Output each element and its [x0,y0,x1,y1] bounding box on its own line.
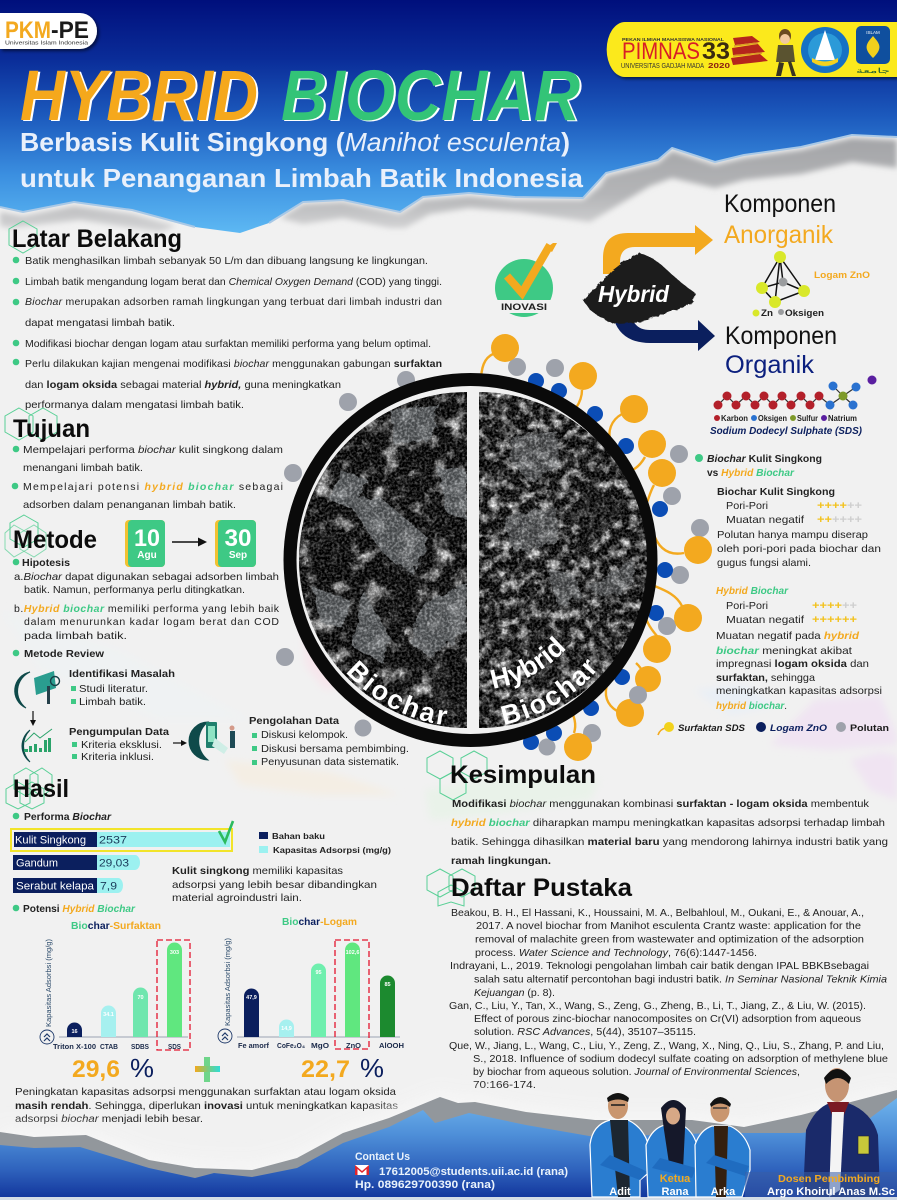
text: pengolahan data [249,715,409,768]
text: hybrid biochar: Pori-Pori [726,600,768,612]
panel: tujuan [5,408,283,511]
text: hybrid biochar: impregnasi logam oksida dan [716,658,869,670]
heading: komponen anorganik [724,190,836,249]
text: conclusion [451,798,888,867]
figure: Rana: Rana [662,1186,689,1198]
list: objectives: Mempelajari potensi hybrid biochar sebagai [23,481,283,493]
photo: biochar SEM [295,385,470,735]
text: pengumpulan data [69,726,169,763]
subheading: potensi hybrid biochar: Potensi Hybrid Biochar [23,903,136,915]
logos: PIMNAS 33 banner: 33 [702,38,730,65]
label: Biochar (hybrid): Biochar [500,659,596,725]
text: results summary: masih rendah . Sehingga, diperlukan inovasi untuk meningkatkan kapasitas [15,1100,398,1112]
date card: 30 Sep: Sep [229,550,247,561]
icon: mascot [776,29,796,76]
footer: sea and ridges [0,1085,897,1200]
chart: biochar-logam: CoFe₂O₄ [277,1041,305,1050]
text: kulit singkong note: material agroindustri lain. [172,892,302,904]
chart: biochar-surfaktan: CTAB [100,1042,119,1051]
chart: biochar-surfaktan: Triton X-100 [53,1042,96,1051]
bar chart: adsorption by agro material: 7,9 [100,880,117,892]
chart: biochar-logam [218,916,404,1050]
heading: comparison [695,453,822,479]
heading: daftar pustaka: Daftar Pustaka [451,874,633,902]
diagram: ZnO tetrahedron: Oksigen [785,308,824,318]
diagram: SDS molecule: Sodium Dodecyl Sulphate (SDS) [710,425,862,437]
text: contact: Contact Us [355,1151,410,1163]
list: background points: dapat mengatasi limbah batik. [25,317,175,329]
list: background points: Modifikasi biochar dengan logam atau surfaktan memiliki performa yang belum optimal. [25,338,431,350]
text: references: salah satu alternatif percontohan bagi industri batik. In Seminar Nasional Teknik Kimia [474,974,887,986]
logos: PIMNAS 33 banner: PEKAN ILMIAH MAHASISWA NASIONAL [622,37,724,42]
panel: metode [5,515,409,768]
text: hybrid biochar [716,585,882,712]
icon: inovasi badge [494,243,557,317]
text: references [449,907,888,1091]
title: HYBRID BIOCHAR: BIOCHAR [283,58,582,137]
text: results summary [15,1086,398,1125]
subtitle: untuk Penanganan Limbah Batik Indonesia [20,163,584,193]
text: pengumpulan data: Pengumpulan Data [69,726,169,738]
text: hybrid biochar: biochar meningkat akibat [716,645,852,657]
subheading: performa biochar: Performa Biochar [24,811,112,823]
text: pengolahan data: Diskusi bersama pembimbing. [261,743,409,755]
text: contact: Hp. 089629700390 (rana) [355,1179,495,1191]
heading: komponen organik [725,322,837,379]
logo: PKM-PE [0,13,97,49]
text: identifikasi masalah: Limbah batik. [79,696,146,708]
list: background points [13,255,442,411]
chart: biochar-logam: Biochar-Logam [282,916,357,928]
list: background points: Limbah batik mengandung logam berat dan Chemical Oxygen Demand (COD) yang tinggi. [25,276,442,288]
photo circle: biochar vs hybrid biochar [284,373,658,747]
text: hipotesis [13,557,280,642]
text: references: Kejuangan (p. 8). [474,987,555,999]
text: biochar kulit singkong: Biochar Kulit Singkong [717,486,835,498]
text: biochar kulit singkong: ++++++ [817,514,862,526]
diagram: SDS molecule: Sulfur [797,414,818,423]
logos: PIMNAS 33 banner: PIMNAS [622,38,700,65]
text: hybrid biochar: hybrid biochar. [716,700,787,712]
chart: biochar-logam: 95 [315,970,322,976]
icon: inovasi badge: INOVASI [501,302,547,313]
chart: biochar-surfaktan: SDS [168,1042,181,1051]
icon: UII seal [856,26,890,75]
text: pengolahan data: Diskusi kelompok. [261,729,348,741]
text: results summary: Peningkatan kapasitas adsorpsi menggunakan surfaktan atau logam oksida [15,1086,396,1098]
text: kulit singkong note [172,865,377,904]
text: metode review: Metode Review [24,648,105,660]
text: identifikasi masalah: Identifikasi Masalah [69,668,175,680]
logos: PIMNAS 33 banner: 2020 [708,63,730,70]
figure: Adit [590,1093,652,1198]
text: kulit singkong note: adsorpsi yang lebih besar dibandingkan [172,879,377,891]
title: HYBRID BIOCHAR: BIOCHAR [281,57,580,136]
list: background points: Biochar merupakan adsorben ramah lingkungan yang terbuat dari limbah industri dan [25,296,442,308]
chart: biochar-surfaktan: 16 [71,1029,78,1035]
icon: hexagon motif [5,515,46,557]
arrow: timeline [172,538,207,546]
text: hipotesis: batik. Namun, performanya perlu ditingkatkan. [24,584,245,596]
date card: 30 Sep: 30 [224,525,252,552]
text: references: 2017. A novel biochar from Manihot esculenta Crantz waste: application for the [476,920,861,932]
text: kulit singkong note: Kulit singkong memiliki kapasitas [172,865,343,877]
legend: bar chart: Kapasitas Adsorpsi (mg/g) [273,845,391,855]
figure: Dosen: Argo Khoirul Anas M.Sc [767,1186,895,1198]
legend: particles: Logam ZnO [770,723,828,734]
subtitle [20,127,584,193]
icon: hexagon motif [5,408,57,440]
logo: PKM-PE: -PE [51,17,89,44]
text: hipotesis: a.Biochar dapat digunakan sebagai adsorben limbah [14,571,279,583]
bar chart: adsorption by agro material: Kulit Singkong [15,834,86,846]
text: contact: 17612005@students.uii.ac.id (rana) [379,1166,568,1178]
icon: UII seal: ISLAM [866,30,880,35]
legend: bar chart [259,831,391,855]
text: references: solution. RSC Advances, 5(44), 35107–35115. [474,1026,696,1038]
text: references: S., 2018. Influence of sodium dodecyl sulfate coating on adsorption of methylene blue [473,1053,888,1065]
top banner: sky with cloud edge [0,0,897,233]
chart: biochar-surfaktan: 34.1 [103,1012,114,1018]
text: hybrid biochar: meningkatkan kapasitas adsorpsi [716,685,882,697]
text: references: 70:166-174. [473,1079,536,1091]
heading: comparison: Biochar Kulit Singkong [707,453,822,465]
list: background points: Perlu dilakukan kajian mengenai modifikasi biochar menggunakan gabungan surfaktan [25,358,442,370]
date card: 30 Sep [215,520,256,567]
heading: kesimpulan: Kesimpulan [450,761,596,789]
text: biochar kulit singkong: oleh pori-pori pada biochar dan [717,543,881,555]
text: hybrid biochar: Muatan negatif pada hybrid [716,630,860,642]
figure: Arka: Arka [711,1186,736,1198]
text: hipotesis: dalam menurunkan kadar logam berat dan COD [24,616,279,628]
list: objectives: adsorben dalam penanganan limbah batik. [23,499,236,511]
heading: komponen anorganik: Anorganik [724,221,833,249]
text: references: process. Water Science and Technology , 76(6):1447-1456. [475,947,757,959]
diagram: SDS molecule [710,376,876,437]
text: references: by biochar from aqueous solution. Journal of Environmental Sciences, [473,1066,800,1078]
diagram: ZnO tetrahedron [752,251,870,318]
diagram: SDS molecule: Karbon [721,414,748,423]
date card: 10 Agu: Agu [137,550,157,561]
arrow: to anorganik [603,225,713,274]
figure: Arka [695,1097,750,1198]
text: hybrid biochar: Muatan negatif [726,614,804,626]
icon: hexagon motif [6,768,52,809]
text: references: Indrayani, L., 2019. Teknologi pengolahan limbah cair batik dengan IPAL BBKBsebagai [450,960,869,972]
diagram: SDS molecule: Oksigen [758,414,787,423]
heading: latar belakang: Latar Belakang [12,225,182,253]
chart: biochar-surfaktan: 303 [170,950,179,956]
text: hybrid biochar: Hybrid Biochar [716,585,789,597]
logo: PKM-PE: Universitas Islam Indonesia [5,40,89,46]
bar chart: adsorption by agro material: 2537 [99,834,127,846]
text: identifikasi masalah [69,668,175,708]
arrow: to organik [614,318,715,351]
icon: green check [219,821,233,842]
text: hybrid biochar: surfaktan, sehingga [716,672,815,684]
arrow: down [30,711,36,726]
text: biochar kulit singkong [717,486,881,569]
chart: biochar-surfaktan: SDBS [131,1042,149,1051]
logos: PIMNAS 33 banner: UNIVERSITAS GADJAH MADA [621,63,704,70]
list: background points: performanya dalam mengatasi limbah batik. [25,399,244,411]
text: references: Beakou, B. H., El Hassani, K., Houssaini, M. A., Belbahloul, M., Oukani, E., & Anouar, A., [451,907,864,919]
icon: growth chart [22,729,52,762]
text: references: removal of malachite green from wastewater and optimization of the adsorption [475,934,864,946]
heading: komponen anorganik: Komponen [724,190,836,218]
diagram: SDS molecule: Natrium [828,414,857,423]
heading: comparison: vs Hybrid Biochar [707,467,795,479]
text: references: Que, W., Jiang, L., Wang, C., Liu, Y., Zeng, Z., Wang, X., Ning, Q., Liu, S., Zhang, P. and Liu, [449,1040,884,1052]
text: contact [355,1151,568,1191]
chart: biochar-logam: MgO [311,1041,329,1050]
text: biochar kulit singkong: Muatan negatif [726,514,804,526]
list: background points: Batik menghasilkan limbah sebanyak 50 L/m dan dibuang langsung ke lingkungan. [25,255,428,267]
stat: 29,6 percent: 29,6 [72,1056,120,1083]
text: pengumpulan data: Kriteria inklusi. [81,751,154,763]
list: objectives: menangani limbah batik. [23,462,143,474]
text: conclusion: Modifikasi biochar menggunakan kombinasi surfaktan - logam oksida membentuk [452,798,870,810]
chart: biochar-logam: 85 [384,982,391,988]
text: pengolahan data: Penyusunan data sistematik. [261,756,399,768]
title: HYBRID BIOCHAR: HYBRID [20,57,258,136]
stat: 29,6 percent [72,1053,154,1083]
logos: PIMNAS 33 banner [607,22,897,77]
text: hybrid biochar: ++++++ [812,614,857,626]
decorations: surfactant, metal and pollutant particles around the ring [276,334,712,761]
text: conclusion: batik. Sehingga dihasilkan material baru yang mendorong lahirnya industri batik yang [451,836,888,848]
legend: particles: Polutan [850,723,889,734]
chart: biochar-logam: Fe amorf [238,1041,269,1050]
heading: metode: Metode [13,526,97,554]
text: results summary: adsorpsi biochar menjadi lebih besar. [15,1113,203,1125]
legend: bar chart: Bahan baku [272,831,325,841]
text: hipotesis: pada limbah batik. [24,630,127,642]
icon: blue ministry seal [801,27,849,73]
text: biochar kulit singkong: gugus fungsi alami. [717,557,811,569]
heading: hasil: Hasil [13,775,69,803]
heading: komponen organik: Organik [725,351,814,379]
chart: biochar-surfaktan [40,920,190,1051]
date card: 10 Agu [125,520,165,567]
text: hipotesis: b.Hybrid biochar memiliki performa yang lebih baik [14,603,280,615]
icon: hexagon motif [9,221,37,253]
diagram: ZnO tetrahedron: Zn [761,308,773,318]
background: faint Indonesia map [0,600,897,820]
icon: hybrid charcoal pile [583,253,695,323]
stat: 22,7 percent: 22,7 [301,1056,350,1083]
icon: hexagon motif [427,751,487,800]
icon: phone analysis [189,722,235,760]
diagram: ZnO tetrahedron: Logam ZnO [814,270,870,281]
bar chart: adsorption by agro material: Gandum [16,858,58,870]
bar chart: adsorption by agro material: 29,03 [99,858,129,870]
text: pengolahan data: Pengolahan Data [249,715,339,727]
arrow: right [173,740,187,746]
text: references: Effect of porous zinc-biochar nanocomposites on Cr(VI) adsorption from aqueous [474,1013,861,1025]
chart: biochar-logam: 47,9 [246,995,257,1001]
chart: biochar-logam: 102,6 [346,950,359,956]
label: Hybrid: Hybrid [490,636,566,689]
subtitle: Berbasis Kulit Singkong ( Manihot esculenta) [20,127,570,157]
chart: biochar-surfaktan: 70 [137,995,144,1001]
icon: mail [355,1165,369,1175]
stat: 29,6 percent: % [130,1053,154,1083]
chart: biochar-logam: 14,9 [281,1026,292,1032]
chart: biochar-logam: Kapasitas Adsorbsi (mg/g) [223,938,232,1026]
date card: 10 Agu: 10 [134,525,160,552]
icon: hexagon motif [427,869,475,906]
title: HYBRID BIOCHAR: HYBRID [22,58,260,137]
panel: hasil [6,768,404,1125]
logo: PKM-PE: PKM [5,17,51,44]
text: biochar kulit singkong: Polutan hanya mampu diserap [717,529,868,541]
text: conclusion: hybrid biochar diharapkan mampu meningkatkan kapasitas adsorpsi terhadap limbah [451,817,885,829]
chart: biochar-surfaktan: Biochar-Surfaktan [71,920,161,932]
label: Biochar: Biochar [346,660,448,724]
figure: Rana [646,1100,698,1198]
figure: Dosen: Dosen Pembimbing [778,1173,880,1185]
icon: magnifier research [15,671,60,708]
legend: particles [658,722,889,735]
panel: latar belakang [9,221,442,411]
heading: tujuan: Tujuan [13,415,90,443]
title: HYBRID BIOCHAR [20,57,582,137]
heading: komponen organik: Komponen [725,322,837,350]
panel: daftar pustaka [427,869,888,1091]
figure: Adit: Adit [609,1186,631,1198]
stat: 22,7 percent [301,1053,384,1083]
list: objectives: Mempelajari performa biochar kulit singkong dalam [23,444,283,456]
icon: UII seal: جامعة [856,67,890,75]
panel: biochar vs hybrid biochar [658,453,889,735]
figure: Dosen [745,1068,897,1198]
legend: particles: Surfaktan SDS [678,723,746,734]
text: biochar kulit singkong: ++++ ++ [817,500,862,512]
text: conclusion: ramah lingkungan. [451,855,551,867]
bar chart: adsorption by agro material: Serabut kelapa [16,880,95,892]
text: hybrid biochar: ++++ ++ [812,600,857,612]
divider: photo split [470,390,476,730]
photo: hybrid biochar SEM [475,385,650,735]
text: pengumpulan data: Kriteria eksklusi. [81,739,162,751]
text: hipotesis: Hipotesis [22,557,70,569]
icon: hybrid charcoal pile: Hybrid [598,281,670,307]
icon: plus [195,1057,220,1082]
stat: 22,7 percent: % [360,1053,384,1083]
chart: biochar-logam: AlOOH [379,1041,404,1050]
list: objectives [12,444,283,511]
text: identifikasi masalah: Studi literatur. [79,683,148,695]
figure: Rana: Ketua [660,1173,691,1185]
chart: biochar-logam: ZnO [346,1041,361,1050]
list: background points: dan logam oksida sebagai material hybrid, guna meningkatkan [25,379,341,391]
chart: biochar-surfaktan: Kapasitas Adsorbsi (mg/g) [44,939,53,1027]
text: references: Gan, C., Liu, Y., Tan, X., Wang, S., Zeng, G., Zheng, B., Li, T., Jiang, Z., & Liu, W. (2015). [449,1000,866,1012]
bar chart: adsorption by agro material [11,829,232,893]
panel: kesimpulan [427,751,888,867]
text: biochar kulit singkong: Pori-Pori [726,500,768,512]
